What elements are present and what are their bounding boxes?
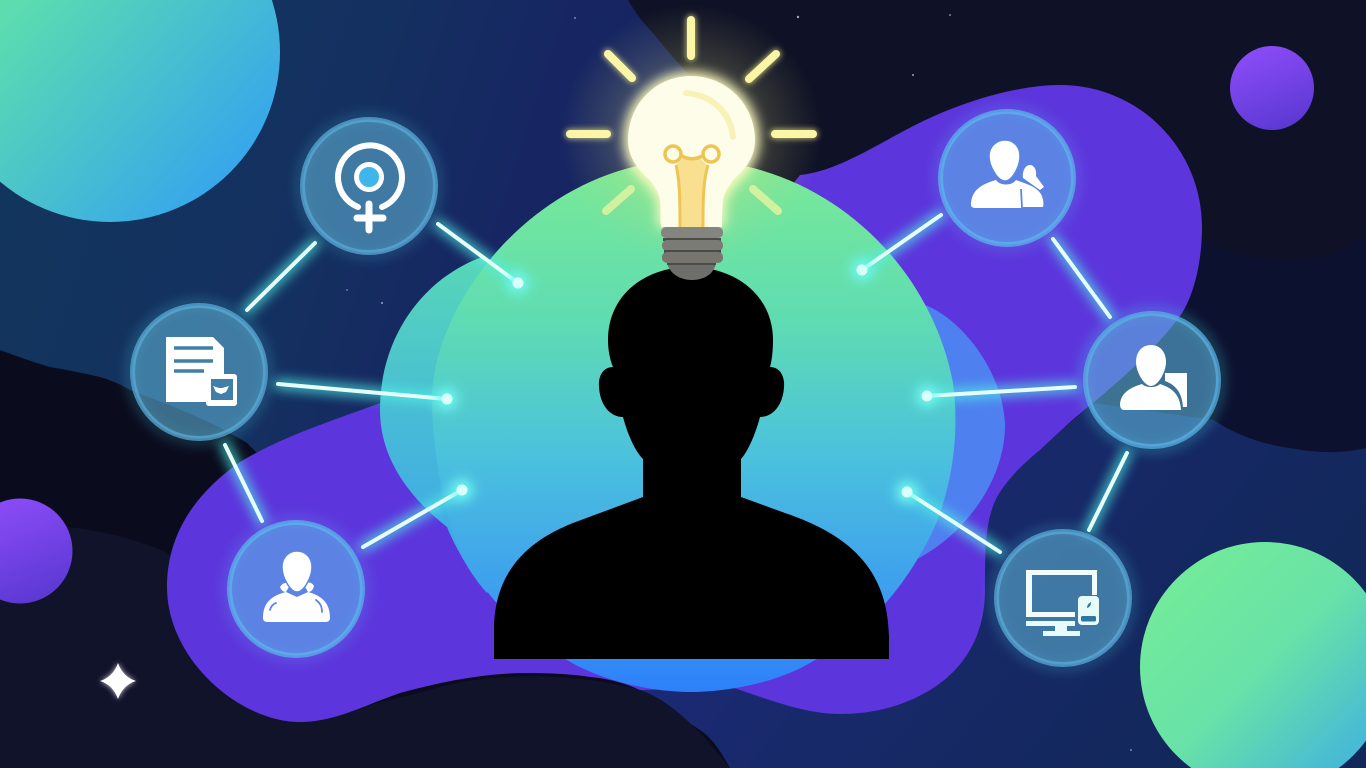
icon: person with card: [1120, 345, 1187, 410]
node: computer monitor: [994, 529, 1132, 667]
node: person with companion: [938, 109, 1076, 247]
light rays: [570, 20, 813, 211]
light bulb: [561, 5, 821, 280]
filament: [665, 146, 719, 227]
central blob: right lobe: [800, 305, 1005, 560]
decorative circle: top right purple: [1230, 46, 1314, 130]
icon: person with shoulder detail: [971, 140, 1044, 208]
decorative circle: top left: [0, 0, 280, 222]
central blob: left lobe: [380, 257, 600, 593]
node: person with pigtails: [227, 520, 365, 658]
node: document: [130, 303, 268, 441]
icon: document with badge: [166, 337, 237, 406]
distant stars: [346, 14, 1132, 751]
bulb glass: [624, 72, 759, 227]
node: female symbol: [300, 117, 438, 255]
decorative circle: bottom right: [1140, 542, 1366, 768]
silhouette of a person: [494, 267, 889, 659]
icon: female symbol with target: [338, 145, 402, 230]
icon: person with pigtails: [263, 551, 330, 622]
node: person with card: [1083, 311, 1221, 449]
icon: sparkle: [100, 663, 136, 699]
decorative circle: left purple: [0, 498, 72, 604]
screw base: [661, 227, 723, 280]
central blob: main shape: [432, 160, 955, 692]
connector lines: [225, 215, 1127, 552]
purple blob: [167, 85, 1202, 722]
icon: monitor with device: [1026, 570, 1099, 636]
